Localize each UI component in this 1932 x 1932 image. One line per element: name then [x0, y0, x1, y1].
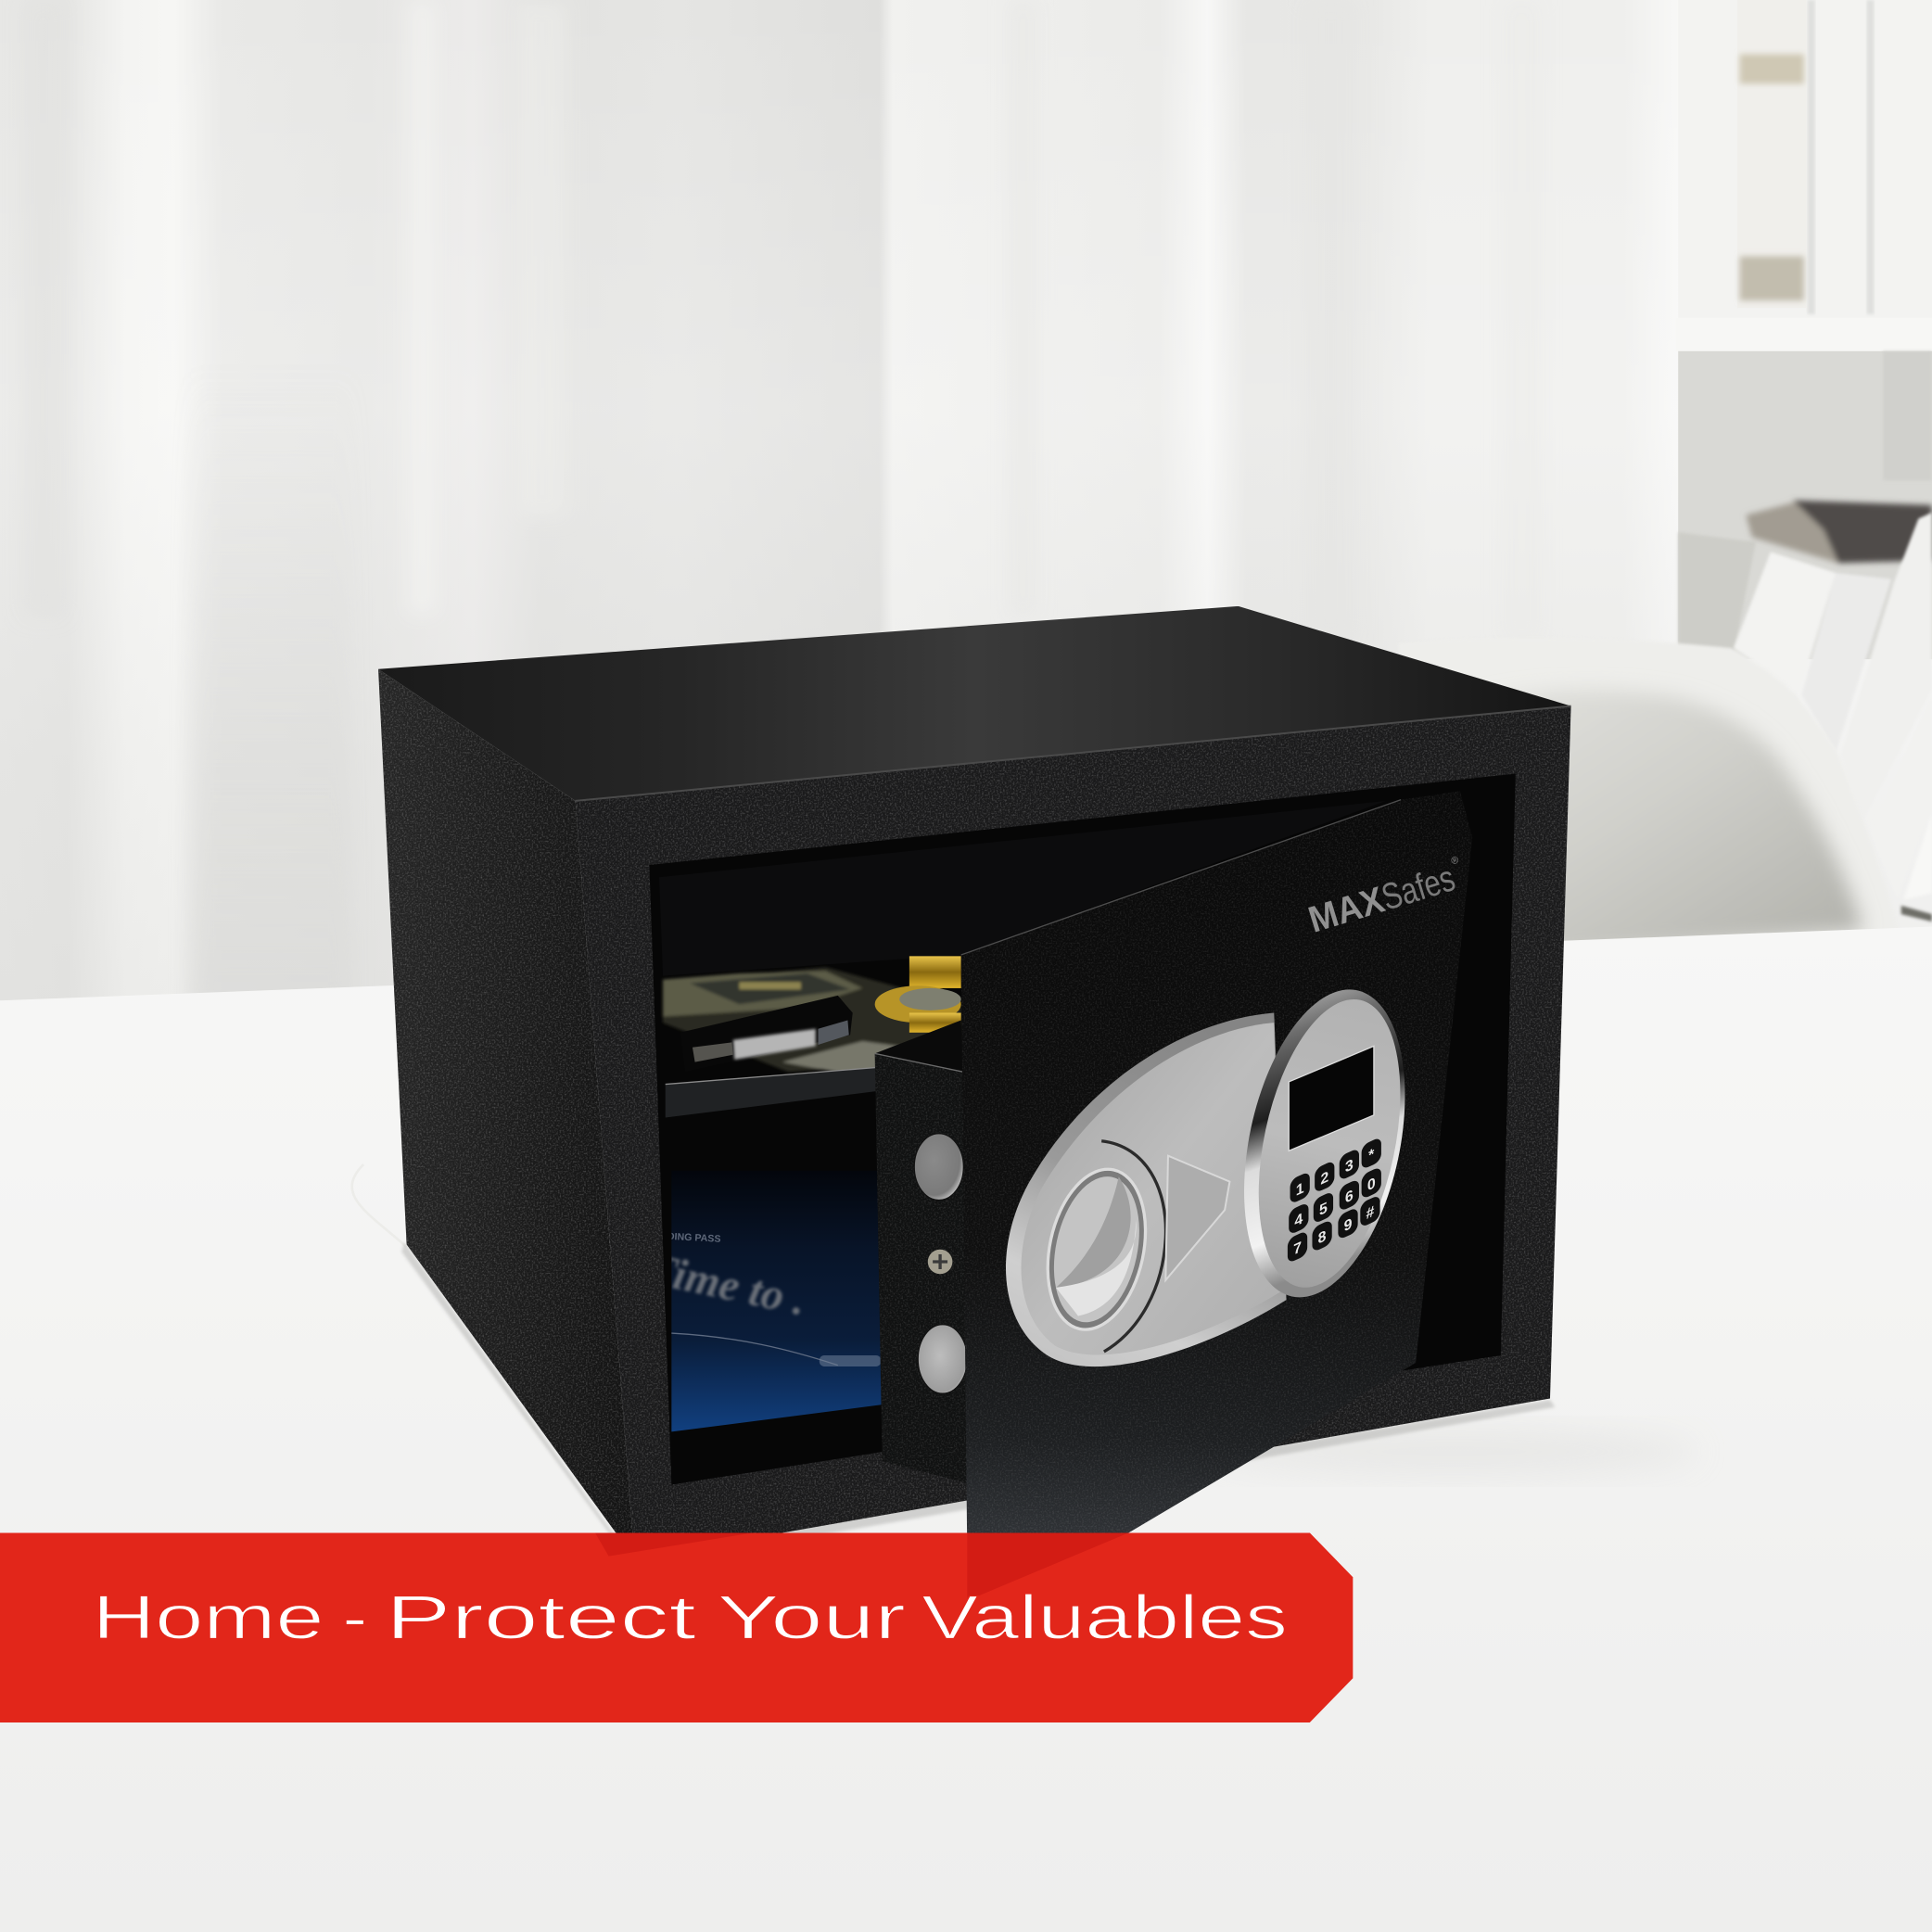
magazine stack — [1746, 501, 1932, 563]
bolt lower — [918, 1325, 967, 1393]
brand logo — [1303, 855, 1469, 941]
thumb turn knob — [1034, 1160, 1160, 1339]
upper interior wall — [659, 801, 1386, 976]
keypad dial ring — [1218, 974, 1430, 1312]
keypad buttons: 3 — [1345, 1155, 1354, 1176]
keypad buttons: 8 — [1318, 1227, 1327, 1248]
bolt upper — [914, 1134, 963, 1201]
banner text: - — [342, 1584, 367, 1653]
safe left side — [378, 669, 634, 1558]
safe — [378, 606, 1571, 1568]
keypad buttons: 6 — [1345, 1187, 1354, 1207]
chair back — [1399, 638, 1900, 973]
banner text: Home — [93, 1584, 324, 1653]
keypad buttons: * — [1368, 1145, 1375, 1164]
brand logo: Safes — [1377, 858, 1459, 919]
usb drive — [680, 996, 853, 1072]
safe top face — [378, 606, 1571, 801]
table surface — [0, 926, 1932, 1932]
chair rim — [1399, 638, 1900, 973]
lcd display — [1289, 1046, 1374, 1150]
blue document — [671, 1177, 881, 1431]
cash on shelf — [663, 967, 961, 1077]
keypad buttons: 1 — [1296, 1179, 1304, 1200]
safe interior — [638, 774, 1516, 1485]
keypad buttons: 9 — [1344, 1214, 1352, 1235]
banner text — [93, 1584, 1288, 1653]
keypad dial face — [1235, 986, 1424, 1301]
keypad buttons: 4 — [1294, 1210, 1303, 1230]
blue document: Time to . — [644, 1244, 810, 1326]
blue document: BOARDING PASS — [638, 1229, 721, 1245]
keypad buttons: 5 — [1319, 1199, 1328, 1219]
banner text: Protect — [386, 1584, 696, 1653]
keypad buttons: 2 — [1320, 1168, 1328, 1188]
keypad buttons: # — [1366, 1202, 1375, 1223]
red banner — [0, 1532, 1353, 1722]
bookshelf with books — [1676, 0, 1932, 922]
arrow emboss — [1165, 1156, 1229, 1280]
keypad buttons — [1288, 1137, 1381, 1264]
tilted white books — [1734, 513, 1932, 922]
brand logo: MAX — [1304, 879, 1390, 941]
electronic lock plate — [1006, 974, 1430, 1366]
keypad buttons: 7 — [1293, 1238, 1302, 1259]
screw — [928, 1250, 952, 1274]
door edge with bolts — [875, 1020, 973, 1485]
background: white curtains — [0, 0, 1932, 1023]
safe front frame — [576, 706, 1571, 1558]
keypad buttons: 0 — [1367, 1174, 1376, 1194]
shelf — [666, 1067, 883, 1117]
door front — [961, 791, 1472, 1555]
banner text: Valuables — [922, 1584, 1288, 1653]
safe showing through banner — [595, 1532, 1128, 1600]
gold watch — [875, 956, 961, 1033]
chair seat shell — [1435, 690, 1863, 967]
patterned book spine — [1737, 0, 1806, 308]
safe shadow on table — [401, 1242, 1555, 1568]
brand logo: ® — [1450, 855, 1460, 867]
banner text: Your — [718, 1584, 906, 1653]
crescent groove — [1101, 1141, 1166, 1352]
